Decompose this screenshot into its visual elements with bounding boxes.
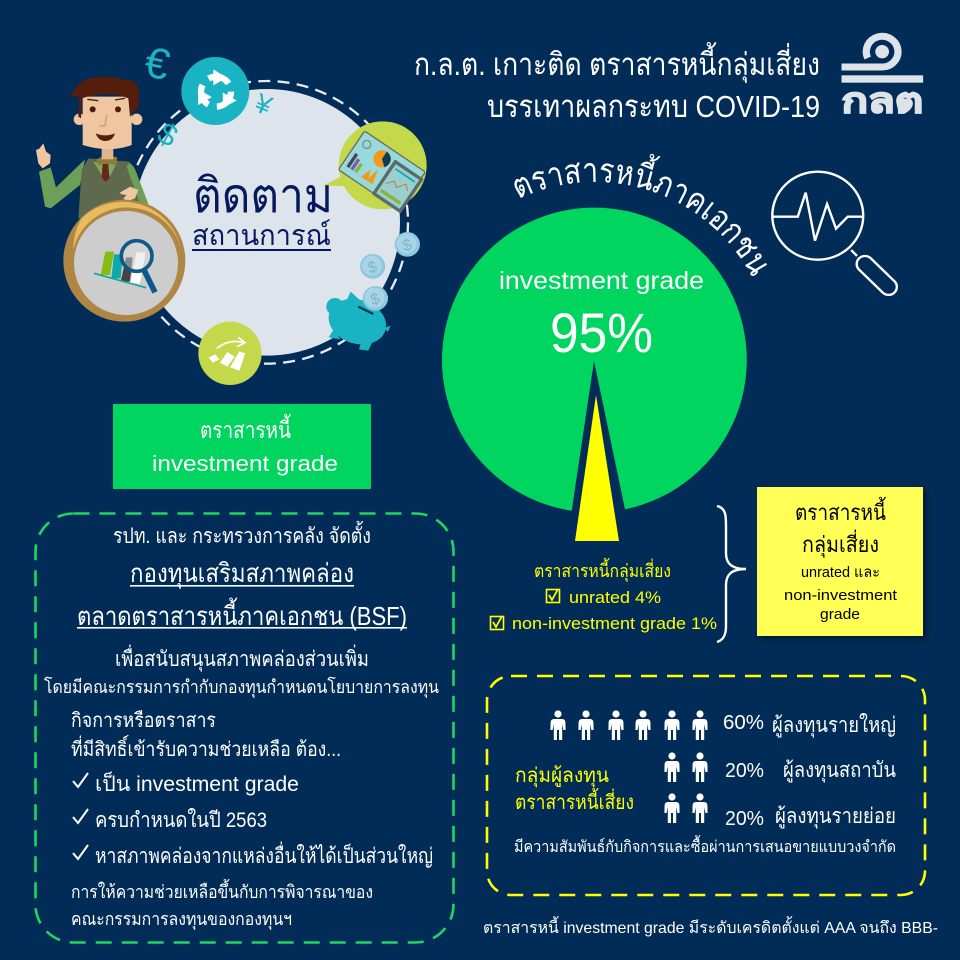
checklist: เป็น investment grade (95, 770, 299, 796)
label box: investment grade (113, 404, 371, 489)
icons: people row 20% (664, 752, 708, 782)
callout: at-risk bonds (757, 487, 923, 636)
heading: monitor situation: สถานการณ์ (192, 219, 331, 252)
legend: at-risk bonds: non-investment grade 1% (512, 614, 717, 633)
icon: recycle circle (181, 57, 249, 125)
panel: BSF fund: กองทุนเสริมสภาพคล่อง (130, 558, 354, 589)
icon: dashboard bubble (323, 121, 428, 214)
panel: investor groups: 20% (725, 760, 764, 782)
logo: SEC (842, 36, 923, 120)
bracket (717, 506, 746, 642)
legend: at-risk bonds (490, 558, 717, 633)
wedge: yellow at risk (575, 395, 619, 541)
panel: BSF fund: ที่มีสิทธิ์เข้ารับความช่วยเหลือ ต้อง... (71, 734, 341, 761)
checklist (73, 770, 433, 868)
checklist: ครบกำหนดในปี 2563 (95, 808, 267, 832)
icon: dollar: $ (152, 116, 183, 154)
panel: BSF fund: คณะกรรมการลงทุนของกองทุนฯ (71, 909, 292, 930)
panel: investor groups: ผู้ลงทุนรายย่อย (775, 805, 896, 829)
legend: at-risk bonds: ตราสารหนี้กลุ่มเสี่ยง (534, 558, 671, 582)
callout: at-risk bonds: กลุ่มเสี่ยง (802, 529, 879, 558)
panel: BSF fund: เพื่อสนับสนุนสภาพคล่องส่วนเพิ่ม (115, 644, 369, 672)
checklist: หาสภาพคล่องจากแหล่งอื่นให้ได้เป็นส่วนใหญ่ (95, 841, 433, 868)
pie chart: 95 / 5 (442, 208, 747, 541)
icons: people row 20% retail (664, 793, 708, 823)
number: 95%: 95% (550, 301, 653, 364)
panel: investor groups (487, 676, 925, 895)
callout: at-risk bonds: ตราสารหนี้ (795, 497, 886, 525)
panel: investor groups: 20% (725, 808, 764, 830)
icons: people row 60% (550, 710, 708, 740)
heading: monitor situation: ติดตาม (193, 170, 333, 223)
panel: BSF fund: ตลาดตราสารหนี้ภาคเอกชน (BSF) (77, 597, 407, 631)
character: man (36, 77, 151, 218)
title: ก.ล.ต. เกาะติด ตราสารหนี้กลุ่มเสี่ยง (414, 42, 820, 84)
panel: investor groups: 60% (723, 712, 764, 734)
icon: coins and piggy bank (323, 232, 420, 352)
panel: BSF fund: รปท. และ กระทรวงการคลัง จัดตั้ง (113, 521, 371, 548)
panel: investor groups: มีความสัมพันธ์กับกิจการและซื้อผ่านการเสนอขายแบบวงจำกัด (514, 835, 896, 856)
panel: BSF fund: การให้ความช่วยเหลือขึ้นกับการพิจารณาของ (71, 879, 373, 902)
heading: monitor situation (192, 170, 333, 252)
icon: large magnifier (63, 200, 185, 322)
legend: at-risk bonds: unrated 4% (569, 588, 661, 607)
logo: SEC: กลต (842, 81, 923, 120)
icon: pulse magnifier (772, 172, 900, 298)
icon: yen: ¥ (250, 87, 277, 122)
panel: investor groups: กลุ่มผู้ลงทุน (515, 765, 609, 788)
title (414, 42, 820, 124)
illustration: monitoring circle (36, 38, 428, 385)
panel: BSF fund (36, 514, 454, 942)
callout: at-risk bonds: unrated และ (801, 564, 880, 581)
dashed ring (125, 81, 408, 364)
callout: at-risk bonds: non-investment (784, 587, 898, 604)
label: investment grade: investment grade (499, 267, 704, 295)
panel: investor groups: ตราสารหนี้เสี่ยง (515, 788, 634, 814)
panel: investor groups: ผู้ลงทุนสถาบัน (783, 759, 896, 783)
title: บรรเทาผลกระทบ COVID-19 (487, 89, 820, 124)
label box: investment grade: investment grade (152, 451, 338, 476)
footnote: ตราสารหนี้ investment grade มีระดับเครดิตตั้งแต่ AAA จนถึง BBB- (483, 916, 938, 937)
panel: investor groups: ผู้ลงทุนรายใหญ่ (772, 713, 896, 738)
panel: BSF fund: โดยมีคณะกรรมการกำกับกองทุนกำหนดนโยบายการลงทุน (44, 676, 439, 698)
curved heading: corporate bonds: ตราสารหนี้ภาคเอกชน (514, 154, 767, 276)
pale disc (133, 89, 400, 356)
panel: BSF fund: กิจการหรือตราสาร (71, 710, 216, 732)
icon: growth chart circle (198, 322, 262, 385)
icon: euro: € (140, 38, 174, 90)
label box: investment grade: ตราสารหนี้ (200, 414, 291, 443)
callout: at-risk bonds: grade (820, 606, 860, 623)
